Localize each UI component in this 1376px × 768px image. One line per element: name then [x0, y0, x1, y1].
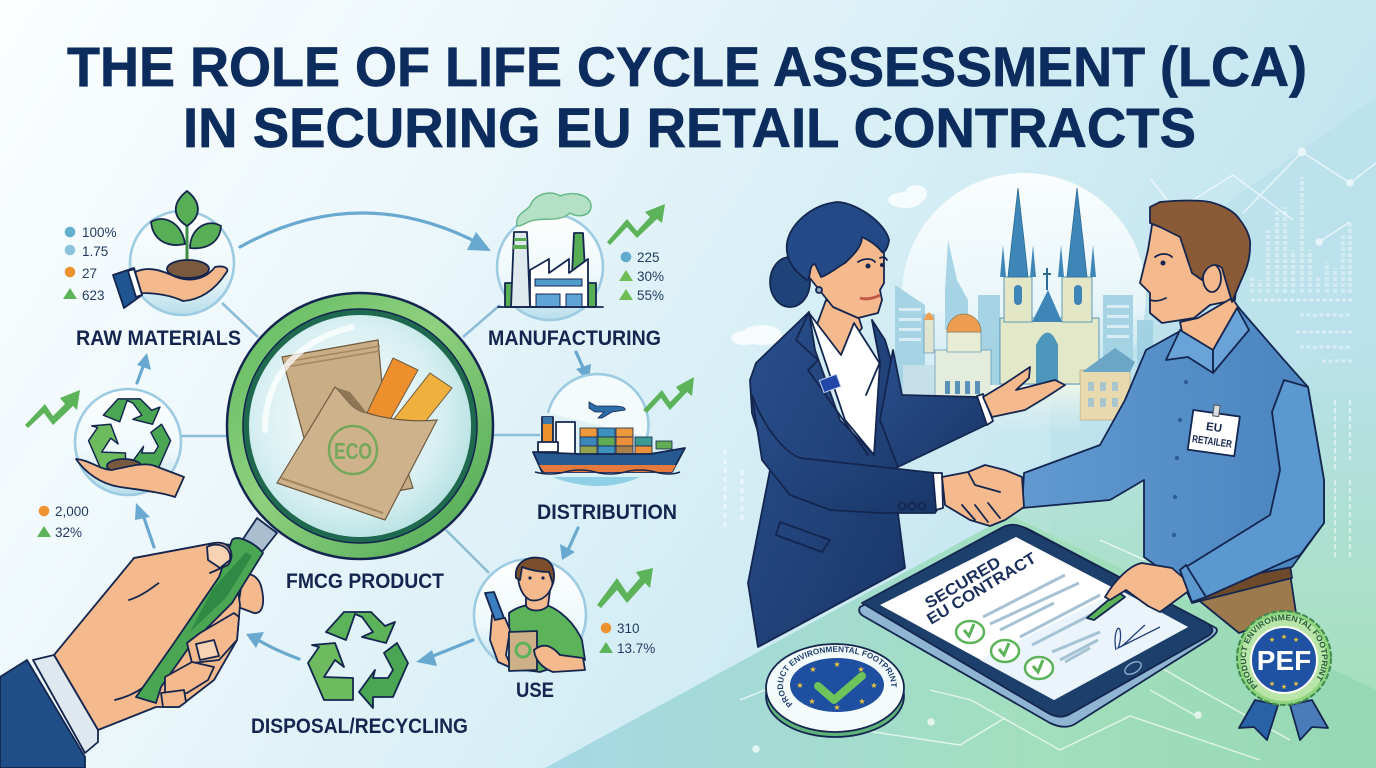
- stage: recovery loop: [25, 389, 184, 540]
- woman in navy suit: [748, 202, 1065, 647]
- lens ring: [227, 293, 493, 559]
- lapel: [796, 312, 880, 455]
- connector lines from product to stages: [180, 303, 540, 573]
- check marks: [956, 621, 1053, 679]
- pocket: [776, 522, 830, 552]
- name badge: EU: [1205, 421, 1223, 435]
- EU stars: ★: [858, 697, 866, 706]
- face details: [1155, 254, 1172, 257]
- suit jacket: [748, 312, 905, 647]
- city backdrop: [895, 173, 1153, 430]
- label: DISTRIBUTION: [537, 501, 677, 524]
- EU stars: ★: [808, 697, 816, 706]
- icon: sprout in hand: [113, 191, 227, 308]
- raised arm: [880, 350, 990, 467]
- raw materials figures: 27: [82, 266, 97, 281]
- stage circle: [130, 211, 234, 315]
- icon: eco snack packs: [277, 340, 452, 520]
- manufacturing figures: 30%: [637, 269, 664, 284]
- growth arrow: [597, 568, 653, 608]
- growth arrow: [25, 390, 80, 428]
- raw materials figures: 1.75: [82, 244, 108, 259]
- handshake hands: [942, 465, 1024, 526]
- signature: [1115, 625, 1160, 650]
- recovery figures: 2,000: [55, 504, 89, 519]
- stage circle: [75, 389, 181, 495]
- raw materials figures: [63, 225, 117, 303]
- icon: cargo ship and plane: [533, 402, 685, 486]
- contract heading: SECURED: [922, 554, 1004, 612]
- EU stars: ★: [809, 665, 817, 674]
- sleeve: [0, 660, 85, 768]
- growth arrow: [643, 377, 694, 413]
- PEF rosette badge: PRODUCT ENVIRONMENTAL FOOTPRINT: [1240, 614, 1328, 690]
- stage circle: [474, 559, 586, 671]
- dome: [548, 374, 648, 437]
- seal ring text: PRODUCT ENVIRONMENTAL FOOTPRINT: [777, 646, 897, 708]
- icon: factory with smoke: [498, 193, 603, 307]
- stage: manufacturing: [488, 193, 665, 350]
- label: RAW MATERIALS: [76, 327, 241, 350]
- neck: [1180, 298, 1239, 352]
- use figures: 13.7%: [617, 641, 655, 656]
- old town houses: [990, 348, 1135, 430]
- palm: [54, 543, 240, 730]
- stage: disposal / recycling: [251, 612, 468, 738]
- bun and hair back: [770, 257, 810, 307]
- handle collar: [243, 518, 277, 552]
- white blouse: [809, 313, 882, 455]
- dome church: [924, 312, 991, 412]
- green check: [818, 676, 862, 700]
- raw materials figures: 623: [82, 288, 105, 303]
- icon: recycling symbol: [308, 612, 408, 708]
- EU stars: ★: [833, 660, 841, 669]
- manufacturing figures: [619, 250, 664, 303]
- stars: ★: [1281, 683, 1287, 691]
- chart lines, top right: [1150, 148, 1376, 245]
- face: [809, 228, 884, 318]
- name badge: RETAILER: [1191, 433, 1233, 451]
- shirt buttons: [1172, 380, 1188, 537]
- trousers and belt: [1186, 560, 1296, 633]
- back finger: [238, 574, 263, 613]
- head: [1140, 215, 1240, 323]
- magnifying glass with product: [227, 293, 493, 559]
- ribbons: [1239, 700, 1278, 740]
- PEF text: PEF: [1257, 645, 1311, 676]
- use figures: 310: [617, 621, 640, 636]
- face details: [858, 257, 887, 262]
- stars: ★: [1293, 680, 1299, 688]
- handshake arm: [752, 395, 940, 513]
- stars: ★: [1281, 633, 1287, 641]
- lifecycle flow arrows: [135, 213, 591, 666]
- stars: ★: [1293, 636, 1299, 644]
- ear: [1203, 264, 1221, 292]
- EU pin: [819, 374, 841, 393]
- label: MANUFACTURING: [488, 327, 661, 350]
- man in blue shirt: [1022, 200, 1324, 633]
- hair: [787, 202, 889, 280]
- raw materials figures: 100%: [82, 225, 117, 240]
- shirt: [1022, 308, 1324, 587]
- title: IN SECURING EU RETAIL CONTRACTS: [183, 96, 1196, 159]
- title: [67, 35, 1307, 159]
- cuff: [33, 655, 98, 753]
- lens glare: [265, 327, 352, 430]
- EU stars: ★: [870, 681, 878, 690]
- label: FMCG product: FMCG PRODUCT: [286, 570, 444, 593]
- circuit traces: [740, 540, 1290, 760]
- stage: raw materials: [63, 191, 241, 350]
- label: DISPOSAL/RECYCLING: [251, 715, 468, 738]
- icon: eco snack packs: ECO: [334, 438, 372, 464]
- stars: ★: [1269, 680, 1275, 688]
- hand holding magnifier: [0, 538, 263, 768]
- PEF rosette badge: [1236, 610, 1332, 741]
- hair: [1150, 200, 1250, 302]
- name badge: [1188, 402, 1241, 456]
- seal: product environmental footprint: [765, 643, 905, 738]
- EU stars: ★: [833, 703, 841, 712]
- gripping fingers: [187, 613, 239, 663]
- collar: [1166, 330, 1213, 373]
- table surface: [545, 515, 1376, 768]
- contract screen: [880, 537, 1188, 700]
- recovery figures: 32%: [55, 525, 82, 540]
- forearm: [1186, 380, 1324, 597]
- handshake scene: [545, 173, 1376, 768]
- open hand: [983, 367, 1065, 417]
- twin-spire cathedral: [1000, 188, 1099, 390]
- EU stars: [796, 660, 878, 712]
- stars: [1269, 633, 1299, 691]
- EU stars: ★: [796, 681, 804, 690]
- icon: recycling symbol over hand: [76, 399, 184, 497]
- stars: ★: [1269, 636, 1275, 644]
- grip: [136, 538, 263, 703]
- recovery figures: [37, 504, 89, 540]
- label: USE: [516, 679, 554, 702]
- growth arrow: [607, 204, 665, 245]
- contract text lines: [983, 575, 1108, 662]
- use figures: [599, 621, 655, 656]
- home button: [1123, 659, 1143, 677]
- hand with stylus: [1087, 563, 1206, 620]
- scalloped seal: [1237, 611, 1331, 705]
- thumb: [150, 543, 232, 590]
- title: THE ROLE OF LIFE CYCLE ASSESSMENT (LCA): [67, 35, 1307, 98]
- icon: consumer with phone and pack: [485, 558, 585, 672]
- stage: use: [474, 558, 655, 702]
- contract heading: EU CONTRACT: [924, 550, 1040, 628]
- neck: [815, 300, 862, 355]
- stage: distribution: [533, 374, 694, 524]
- tablet with contract: [859, 525, 1217, 727]
- manufacturing figures: 225: [637, 250, 660, 265]
- EU stars: ★: [857, 665, 865, 674]
- manufacturing figures: 55%: [637, 288, 664, 303]
- stage circle: [497, 214, 603, 320]
